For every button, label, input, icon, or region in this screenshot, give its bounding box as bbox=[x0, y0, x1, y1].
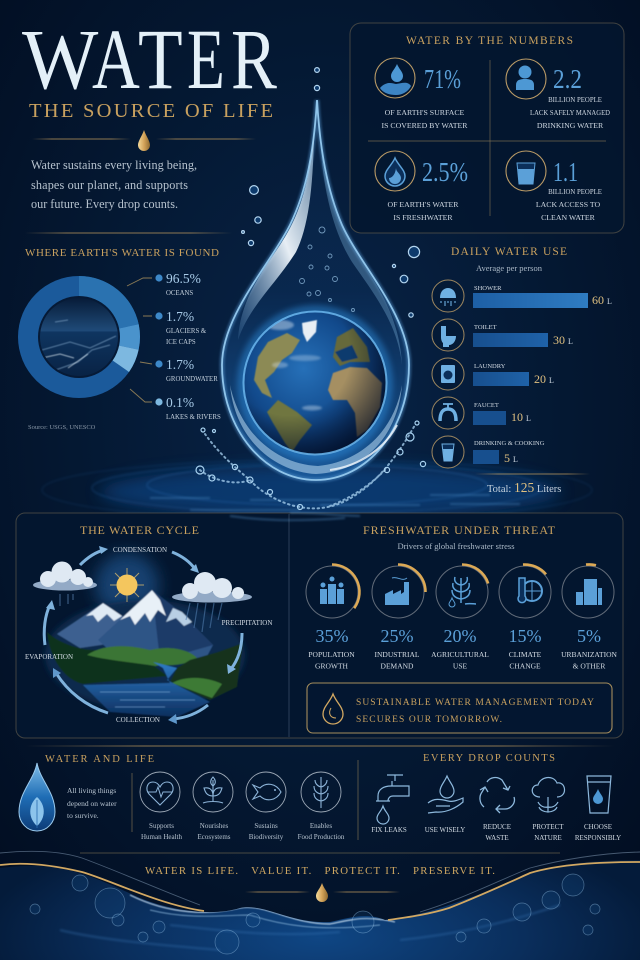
icon: choose responsibly bbox=[575, 776, 621, 842]
driver: urbanization and other: 5% bbox=[577, 626, 601, 646]
legend: lakes and rivers bbox=[155, 395, 221, 421]
panel: every drop counts bbox=[371, 753, 621, 842]
stat: 2.5 percent bbox=[375, 151, 468, 222]
cycle labels bbox=[25, 546, 272, 724]
callout: sustainable water management: SUSTAINABLE WATER MANAGEMENT TODAY bbox=[356, 698, 594, 708]
central water drop with Earth bbox=[222, 100, 409, 480]
donut legend bbox=[127, 271, 221, 421]
icon: sustains biodiversity: Sustains bbox=[254, 822, 278, 830]
legend: glaciers bbox=[155, 309, 207, 346]
scene: mountains and lake bbox=[45, 553, 245, 717]
panel: freshwater under threat bbox=[306, 523, 617, 733]
panel: daily water use bbox=[432, 246, 612, 495]
icon: protect nature bbox=[532, 777, 565, 842]
icon: sustains biodiversity bbox=[246, 772, 286, 841]
stat: 71 percent: OF EARTH'S SURFACE bbox=[385, 108, 465, 117]
icon: enables food production bbox=[298, 772, 345, 841]
row: drinking and cooking: DRINKING & COOKING bbox=[474, 440, 545, 447]
driver: population growth: POPULATION bbox=[308, 650, 355, 659]
intro paragraph: our future. Every drop counts. bbox=[31, 197, 178, 211]
icon: enables food production: Enables bbox=[310, 822, 332, 830]
text: all living things bbox=[67, 786, 117, 820]
title: A bbox=[92, 12, 140, 107]
heading: EVERY DROP COUNTS bbox=[423, 753, 555, 764]
driver: climate change: CLIMATE bbox=[509, 650, 542, 659]
title: T bbox=[138, 13, 183, 107]
panel: water and life bbox=[19, 754, 345, 841]
footer water wave bbox=[0, 851, 640, 960]
panel: daily water use: Average per person bbox=[476, 263, 543, 273]
bubbles inside drop bbox=[300, 227, 354, 312]
row: shower: 60 L bbox=[592, 293, 612, 307]
driver: population growth: GROWTH bbox=[315, 662, 349, 670]
sun bbox=[110, 568, 144, 602]
driver: industrial demand bbox=[372, 564, 426, 670]
subtitle: THE SOURCE OF LIFE bbox=[29, 100, 273, 122]
callout: sustainable water management bbox=[307, 683, 612, 733]
heading: DAILY WATER USE bbox=[451, 246, 567, 258]
stat: 2.5 percent: IS FRESHWATER bbox=[393, 213, 453, 222]
driver: urbanization and other bbox=[561, 564, 617, 670]
icon: use wisely: USE WISELY bbox=[425, 826, 465, 834]
icon: supports human health: Supports bbox=[149, 822, 174, 830]
icon: reduce waste: WASTE bbox=[485, 834, 509, 842]
driver: climate change: CHANGE bbox=[509, 662, 541, 670]
row: laundry bbox=[432, 358, 554, 390]
row: toilet: TOILET bbox=[474, 324, 497, 331]
legend: groundwater bbox=[155, 357, 218, 383]
ocean photo inside donut bbox=[39, 297, 119, 377]
text: all living things: depend on water bbox=[67, 799, 117, 808]
stat: 71 percent bbox=[375, 58, 468, 130]
title: R bbox=[231, 12, 277, 107]
bubbles bbox=[30, 874, 600, 954]
stat: 2.5 percent: 2.5% bbox=[422, 157, 468, 187]
row: drinking and cooking: 5 L bbox=[504, 451, 518, 465]
row: shower bbox=[432, 280, 612, 312]
row: faucet: 10 L bbox=[511, 410, 531, 424]
footer gold drop divider bbox=[245, 883, 400, 902]
row: laundry: 20 L bbox=[534, 372, 554, 386]
icon: reduce waste bbox=[480, 778, 514, 842]
donut chart bbox=[18, 276, 140, 398]
row: drinking and cooking bbox=[432, 436, 545, 468]
legend: glaciers: 1.7% bbox=[166, 309, 194, 324]
stat: 2.2 billion: 2.2 bbox=[553, 64, 582, 94]
legend: lakes and rivers: 0.1% bbox=[166, 395, 194, 410]
legend: glaciers: GLACIERS & bbox=[166, 328, 207, 335]
stat: 2.2 billion: LACK SAFELY MANAGED bbox=[530, 108, 610, 117]
callout: sustainable water management: SECURES OUR TOMORROW. bbox=[356, 715, 502, 725]
driver: climate change bbox=[499, 565, 551, 670]
text: all living things: to survive. bbox=[67, 811, 99, 820]
row: faucet bbox=[432, 397, 531, 429]
heading: WATER AND LIFE bbox=[45, 754, 154, 765]
stat: 1.1 billion: BILLION PEOPLE bbox=[548, 189, 602, 196]
title: E bbox=[187, 12, 225, 108]
source note: Source: USGS, UNESCO bbox=[28, 424, 96, 431]
icon: blue drop with leaf bbox=[19, 763, 55, 831]
cycle labels: EVAPORATION bbox=[25, 653, 73, 661]
drop rim and highlights bbox=[222, 100, 409, 480]
stat: 1.1 billion: LACK ACCESS TO bbox=[536, 200, 600, 209]
icon: enables food production: Food Production bbox=[298, 833, 345, 841]
icon: reduce waste: REDUCE bbox=[483, 823, 511, 831]
panel: the water cycle bbox=[25, 523, 272, 724]
heading: THE WATER CYCLE bbox=[80, 523, 199, 537]
icon: fix leaks bbox=[371, 775, 409, 834]
driver: agricultural use: USE bbox=[453, 662, 468, 670]
heading: where water is found: WHERE EARTH'S WATER IS FOUND bbox=[25, 247, 219, 259]
icon: supports human health: Human Health bbox=[141, 833, 183, 841]
intro paragraph: Water sustains every living being, bbox=[31, 158, 197, 172]
driver: population growth bbox=[306, 564, 359, 670]
stat: 2.2 billion bbox=[506, 59, 610, 130]
stat: 2.2 billion: DRINKING WATER bbox=[537, 121, 604, 130]
text: all living things: All living things bbox=[67, 786, 116, 795]
row: shower: SHOWER bbox=[474, 285, 502, 292]
driver: industrial demand: INDUSTRIAL bbox=[374, 650, 420, 659]
legend: oceans bbox=[155, 271, 201, 297]
panel: cycle and threat container bbox=[16, 513, 623, 738]
legend: groundwater: 1.7% bbox=[166, 357, 194, 372]
cycle arrows bbox=[44, 546, 242, 724]
water ripple pool bbox=[42, 460, 592, 520]
intro paragraph: shapes our planet, and supports bbox=[31, 178, 188, 192]
Earth globe bbox=[237, 305, 393, 461]
driver: industrial demand: 25% bbox=[380, 626, 414, 646]
legend: groundwater: GROUNDWATER bbox=[166, 376, 218, 383]
stat: 71 percent: IS COVERED BY WATER bbox=[382, 121, 468, 130]
row: faucet: FAUCET bbox=[474, 402, 499, 409]
driver: population growth: 35% bbox=[316, 626, 348, 646]
stat: 1.1 billion: 1.1 bbox=[553, 157, 578, 187]
stat: 1.1 billion: CLEAN WATER bbox=[541, 213, 596, 222]
driver: agricultural use bbox=[431, 564, 489, 670]
icon: sustains biodiversity: Biodiversity bbox=[249, 833, 284, 841]
icon: supports human health bbox=[140, 772, 183, 841]
driver: urbanization and other: & OTHER bbox=[573, 662, 605, 670]
legend: oceans: OCEANS bbox=[166, 290, 193, 297]
title bbox=[22, 12, 277, 108]
stat: 2.2 billion: BILLION PEOPLE bbox=[548, 97, 602, 104]
icon: choose responsibly: RESPONSIBLY bbox=[575, 834, 621, 842]
row: toilet bbox=[432, 319, 573, 351]
legend: oceans: 96.5% bbox=[166, 271, 201, 286]
stat: 2.5 percent: OF EARTH'S WATER bbox=[388, 200, 459, 209]
row: laundry: LAUNDRY bbox=[474, 363, 506, 370]
icon: protect nature: NATURE bbox=[534, 834, 562, 842]
closing tagline: WATER IS LIFE. VALUE IT. PROTECT IT. PRESERVE IT. bbox=[145, 865, 495, 877]
stat: 1.1 billion bbox=[506, 151, 602, 222]
legend: glaciers: ICE CAPS bbox=[166, 339, 196, 346]
panel: freshwater under threat: Drivers of global freshwater stress bbox=[397, 541, 515, 551]
icon: use wisely bbox=[425, 776, 465, 834]
stat: 71 percent: 71% bbox=[424, 64, 461, 94]
gold wave line bbox=[0, 864, 204, 911]
cycle labels: COLLECTION bbox=[116, 716, 160, 724]
driver: agricultural use: 20% bbox=[444, 626, 476, 646]
panel: water by the numbers bbox=[350, 23, 624, 233]
splash droplets bbox=[196, 421, 426, 510]
driver: climate change: 15% bbox=[508, 626, 542, 646]
icon: fix leaks: FIX LEAKS bbox=[371, 826, 407, 834]
legend: lakes and rivers: LAKES & RIVERS bbox=[166, 414, 221, 421]
title: W bbox=[22, 13, 99, 108]
title divider with gold drop bbox=[32, 130, 256, 151]
heading: WATER BY THE NUMBERS bbox=[406, 35, 573, 47]
icon: nourishes ecosystems: Nourishes bbox=[200, 822, 228, 830]
cloud left bbox=[33, 562, 97, 606]
driver: urbanization and other: URBANIZATION bbox=[561, 650, 617, 659]
cycle labels: PRECIPITATION bbox=[222, 619, 272, 627]
icon: nourishes ecosystems: Ecosystems bbox=[197, 833, 231, 841]
icon: protect nature: PROTECT bbox=[532, 823, 564, 831]
driver: agricultural use: AGRICULTURAL bbox=[431, 650, 489, 659]
heading: FRESHWATER UNDER THREAT bbox=[363, 523, 556, 537]
total: Total: 125 Liters bbox=[487, 480, 561, 495]
icon: nourishes ecosystems bbox=[193, 772, 233, 841]
icon: choose responsibly: CHOOSE bbox=[584, 823, 612, 831]
cloud right bbox=[172, 572, 252, 632]
cycle labels: CONDENSATION bbox=[113, 546, 167, 554]
row: toilet: 30 L bbox=[553, 333, 573, 347]
driver: industrial demand: DEMAND bbox=[381, 662, 414, 670]
floating droplets outside drop bbox=[242, 68, 420, 317]
intro paragraph bbox=[31, 158, 197, 211]
